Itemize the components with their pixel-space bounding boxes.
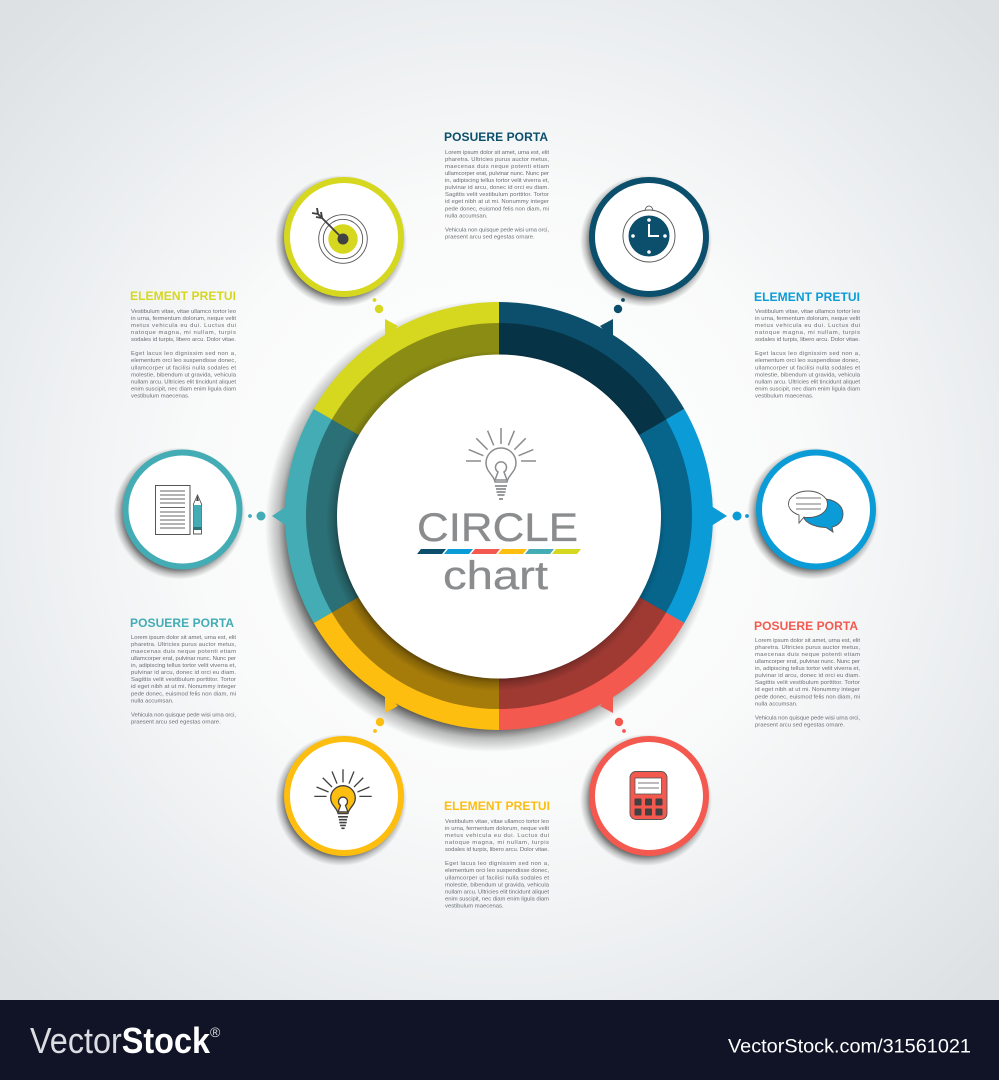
colored stripe (417, 549, 581, 554)
text block: upper left element pretui: vestibulum maecenas. (131, 394, 190, 400)
panel: target (275, 175, 407, 307)
text block: bottom element pretui: elementum orci leo suspendisse donec, (445, 868, 549, 874)
icon: calculator (630, 772, 667, 820)
text block: right posuere porta: Lorem ipsum dolor sit amet, urna est, elit (755, 638, 860, 644)
text block: top posuere porta: nulla accumsan. (445, 213, 488, 219)
text block: right posuere porta (754, 619, 860, 728)
dark inner ring (306, 323, 692, 709)
text block: upper left element pretui: molestie, bibendum ut gravida, vehicula (131, 372, 237, 378)
text block: left posuere porta (130, 616, 236, 726)
text block: bottom element pretui: in urna, fermentum dolorum, neque velit (445, 826, 549, 832)
text block: top posuere porta: pulvinar id arcu, donec id orci eu diam. (445, 185, 549, 191)
text block: upper left element pretui: Vestibulum vitae, vitae ullamco tortor leo (131, 309, 237, 315)
text block: upper right element pretui: Eget lacus leo dignissim sed non a, (755, 351, 860, 357)
text block: left posuere porta: in, adipiscing tellus tortor velit viverra et, (131, 663, 236, 669)
text block: top posuere porta: pharetra. Ultricies purus auctor metus, (445, 157, 549, 163)
text block: upper right element pretui: natoque magna, mi nullam, turpis (755, 330, 860, 336)
text block: left posuere porta: ullamcorper erat, pulvinar nunc. Nunc per (131, 656, 236, 662)
text block: left posuere porta: Vehicula non quisque pede wisi urna orci, (131, 712, 236, 718)
text block: upper right element pretui: nullam arcu. Ultricies elit tincidunt aliquet (755, 379, 860, 385)
text block: upper right element pretui: sodales id turpis, libero arcu. Dolor vitae. (755, 337, 860, 343)
text block: right posuere porta: praesent arcu sed egestas ornare. (755, 722, 845, 728)
panel: light bulb (275, 734, 407, 866)
icon: document and pencil (156, 486, 202, 534)
text block: right posuere porta: nulla accumsan. (755, 701, 798, 707)
centre title: chart: chart (443, 554, 548, 598)
text block: top posuere porta: in, adipiscing tellus tortor velit viverra et, (445, 178, 549, 184)
icon: light bulb (314, 769, 372, 828)
text block: upper right element pretui: metus vehicula eu dui. Luctus dui (755, 323, 860, 329)
text block: upper right element pretui: ELEMENT PRETUI (754, 290, 860, 304)
text block: bottom element pretui: ELEMENT PRETUI (444, 799, 550, 813)
text block: left posuere porta: id eget nibh at ut mi. Nonummy integer (131, 684, 236, 690)
text block: upper left element pretui: Eget lacus leo dignissim sed non a, (131, 351, 236, 357)
text block: upper right element pretui: ullamcorper ut facilisi nulla sodales et (755, 365, 860, 371)
text block: bottom element pretui: vestibulum maecenas. (445, 904, 504, 910)
text block: right posuere porta: maecenas duis neque potenti etiam (755, 652, 860, 658)
icon: target (312, 208, 367, 263)
text block: bottom element pretui: enim suscipit, nec diam enim ligula diam (445, 896, 549, 902)
text block: upper right element pretui: molestie, bibendum ut gravida, vehicula (755, 372, 861, 378)
text block: upper right element pretui: in urna, fermentum dolorum, neque velit (755, 316, 860, 322)
panel: calculator (580, 734, 712, 866)
text block: upper left element pretui: in urna, fermentum dolorum, neque velit (131, 316, 236, 322)
text block: top posuere porta: pede donec, euismod felis non diam, mi (445, 206, 549, 212)
text block: upper right element pretui: Vestibulum vitae, vitae ullamco tortor leo (755, 309, 861, 315)
footer bar (0, 1000, 999, 1080)
text block: upper left element pretui: sodales id turpis, libero arcu. Dolor vitae. (131, 337, 236, 343)
text block: left posuere porta: nulla accumsan. (131, 698, 174, 704)
panel: chat (747, 448, 879, 580)
text block: right posuere porta: in, adipiscing tellus tortor velit viverra et, (755, 666, 860, 672)
text block: upper left element pretui: metus vehicula eu dui. Luctus dui (131, 323, 236, 329)
white centre disc (337, 354, 661, 678)
text block: bottom element pretui: sodales id turpis, libero arcu. Dolor vitae. (445, 847, 549, 853)
text block: upper right element pretui: enim suscipit, nec diam enim ligula diam (755, 386, 860, 392)
text block: left posuere porta: POSUERE PORTA (130, 616, 234, 630)
centre title: CIRCLE: CIRCLE (417, 506, 578, 550)
text block: top posuere porta: id eget nibh at ut mi. Nonummy integer (445, 199, 549, 205)
panel: clock (580, 175, 712, 307)
text block: top posuere porta: maecenas duis neque potenti etiam (445, 164, 549, 170)
text block: upper right element pretui: elementum orci leo suspendisse donec, (755, 358, 860, 364)
text block: bottom element pretui (444, 799, 550, 910)
text block: top posuere porta: Sagittis velit vestibulum porttitor. Tortor (445, 192, 549, 198)
text block: upper left element pretui: enim suscipit, nec diam enim ligula diam (131, 386, 236, 392)
text block: upper left element pretui: natoque magna, mi nullam, turpis (131, 330, 236, 336)
text block: right posuere porta: POSUERE PORTA (754, 619, 858, 633)
text block: upper left element pretui (130, 289, 237, 400)
text block: right posuere porta: id eget nibh at ut mi. Nonummy integer (755, 687, 860, 693)
text block: left posuere porta: pharetra. Ultricies purus auctor metus, (131, 642, 236, 648)
text block: left posuere porta: praesent arcu sed egestas ornare. (131, 720, 221, 726)
text block: left posuere porta: Sagittis velit vestibulum porttitor. Tortor (131, 677, 236, 683)
text block: right posuere porta: pulvinar id arcu, donec id orci eu diam. (755, 673, 860, 679)
text block: top posuere porta: Lorem ipsum dolor sit amet, urna est, elit (445, 150, 549, 156)
text block: top posuere porta: praesent arcu sed egestas ornare. (445, 234, 535, 240)
icon: clock (623, 206, 675, 262)
text block: top posuere porta (444, 130, 549, 240)
text block: top posuere porta: Vehicula non quisque pede wisi urna orci, (445, 228, 549, 234)
circle chart (265, 300, 727, 752)
text block: upper left element pretui: elementum orci leo suspendisse donec, (131, 358, 236, 364)
text block: right posuere porta: pharetra. Ultricies purus auctor metus, (755, 645, 860, 651)
text block: upper right element pretui: vestibulum maecenas. (755, 394, 814, 400)
text block: upper right element pretui (754, 290, 861, 400)
text block: top posuere porta: ullamcorper erat, pulvinar nunc. Nunc per (445, 171, 549, 177)
colored ring with arrow tabs (272, 302, 727, 730)
text block: left posuere porta: Lorem ipsum dolor sit amet, urna est, elit (131, 635, 236, 641)
text block: right posuere porta: ullamcorper erat, pulvinar nunc. Nunc per (755, 659, 860, 665)
text block: bottom element pretui: nullam arcu. Ultricies elit tincidunt aliquet (445, 889, 549, 895)
connector dots (248, 298, 749, 733)
text block: right posuere porta: Vehicula non quisque pede wisi urna orci, (755, 716, 860, 722)
text block: bottom element pretui: molestie, bibendum ut gravida, vehicula (445, 882, 550, 888)
text block: bottom element pretui: metus vehicula eu dui. Luctus dui (445, 833, 549, 839)
text block: upper left element pretui: nullam arcu. Ultricies elit tincidunt aliquet (131, 379, 236, 385)
text block: bottom element pretui: Eget lacus leo dignissim sed non a, (445, 861, 549, 867)
text block: right posuere porta: Sagittis velit vestibulum porttitor. Tortor (755, 680, 860, 686)
registered mark: ® (210, 1024, 221, 1040)
text block: upper left element pretui: ELEMENT PRETUI (130, 289, 236, 303)
text block: left posuere porta: pede donec, euismod felis non diam, mi (131, 691, 236, 697)
text block: upper left element pretui: ullamcorper ut facilisi nulla sodales et (131, 365, 236, 371)
text block: bottom element pretui: natoque magna, mi nullam, turpis (445, 840, 549, 846)
text block: right posuere porta: pede donec, euismod felis non diam, mi (755, 694, 860, 700)
icon: speech bubbles (788, 491, 843, 532)
text block: top posuere porta: POSUERE PORTA (444, 130, 548, 144)
footer logo: VectorStock (30, 1020, 211, 1061)
text block: bottom element pretui: Vestibulum vitae, vitae ullamco tortor leo (445, 819, 550, 825)
text block: left posuere porta: maecenas duis neque potenti etiam (131, 649, 236, 655)
centre logo icon: light bulb (466, 428, 536, 499)
footer image id: VectorStock.com/31561021 (728, 1036, 971, 1058)
text block: bottom element pretui: ullamcorper ut facilisi nulla sodales et (445, 875, 549, 881)
panel: document (114, 448, 246, 580)
text block: left posuere porta: pulvinar id arcu, donec id orci eu diam. (131, 670, 236, 676)
